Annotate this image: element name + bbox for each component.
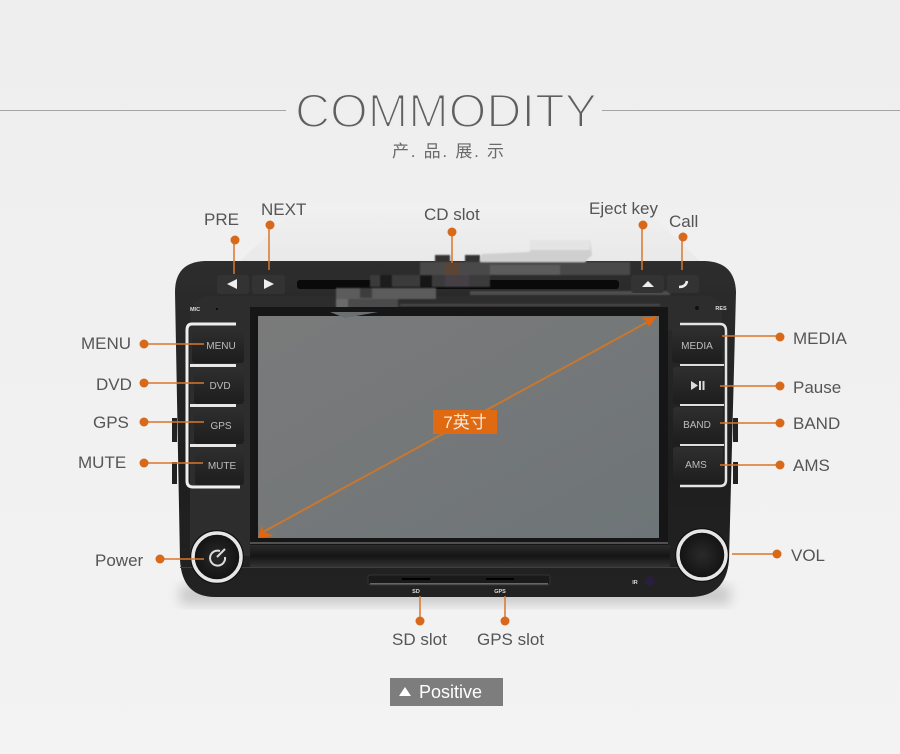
- callout: GPS: [93, 413, 204, 432]
- callout: VOL: VOL: [791, 546, 825, 565]
- callout: MUTE: [78, 453, 203, 472]
- callout: GPS slot: [477, 596, 544, 649]
- badge: 7 inch: [433, 410, 497, 434]
- callout: PRE: PRE: [204, 210, 239, 229]
- callout: SD slot: SD slot: [392, 630, 447, 649]
- button: play pause: [673, 367, 723, 404]
- button: call: [667, 275, 699, 293]
- button: next: [252, 275, 285, 294]
- device body: [175, 261, 736, 597]
- small device labels: RES: [715, 306, 727, 312]
- button: AMS: AMS: [685, 460, 707, 471]
- button: GPS: [194, 407, 244, 444]
- callout: Power: [95, 551, 204, 570]
- callout: CD slot: [424, 205, 480, 263]
- button: Positive: [390, 678, 503, 706]
- device: car head unit: [172, 240, 738, 597]
- CD slot: [297, 280, 619, 289]
- callout: Call: Call: [669, 212, 698, 231]
- power knob: [190, 530, 244, 584]
- diagonal screen-size arrow: [258, 316, 657, 538]
- badge: 7 inch: 7英寸: [443, 413, 487, 432]
- SD and GPS slots: [368, 575, 550, 595]
- volume knob: [675, 528, 729, 582]
- button: AMS: [673, 447, 723, 484]
- title: COMMODITY heading with rules: COMMODITY: [295, 84, 597, 137]
- callout: SD slot: [392, 596, 447, 649]
- callout: Call: [669, 212, 698, 270]
- button: MENU: MENU: [206, 341, 236, 352]
- callout: BAND: [720, 414, 840, 433]
- callout: Pause: [720, 378, 841, 397]
- button: MENU: [192, 327, 244, 363]
- callout: AMS: [720, 456, 830, 475]
- subtitle: Chinese heading: 产. 品. 展. 示: [392, 142, 504, 161]
- left button group: [187, 324, 244, 487]
- callout: MENU: MENU: [81, 334, 131, 353]
- callout: Pause: Pause: [793, 378, 841, 397]
- screen: [258, 316, 659, 538]
- callout: VOL: [732, 546, 825, 565]
- button: MUTE: [195, 447, 244, 485]
- top buttons: [217, 275, 699, 294]
- small device labels: MIC: [190, 307, 200, 313]
- callout: NEXT: [261, 200, 306, 270]
- callout: MENU: [81, 334, 204, 353]
- callout: MEDIA: MEDIA: [793, 329, 848, 348]
- SD and GPS slots: SD: [412, 589, 420, 595]
- callout: NEXT: NEXT: [261, 200, 306, 219]
- callout: MEDIA: [722, 329, 848, 348]
- callout: BAND: BAND: [793, 414, 840, 433]
- callout: Power: Power: [95, 551, 144, 570]
- button: eject: [631, 275, 664, 293]
- callout: Eject key: [589, 199, 658, 270]
- callout: MUTE: MUTE: [78, 453, 126, 472]
- pixelated logo blur: [330, 240, 670, 321]
- button: BAND: BAND: [683, 420, 711, 431]
- callout: Eject key: Eject key: [589, 199, 658, 218]
- callout: CD slot: CD slot: [424, 205, 480, 224]
- button: MUTE: MUTE: [208, 461, 236, 472]
- right button group: [672, 324, 726, 486]
- button: DVD: DVD: [209, 381, 231, 392]
- small device labels: [190, 306, 727, 586]
- button: Positive: Positive: [419, 682, 482, 702]
- SD and GPS slots: GPS: [494, 589, 506, 595]
- callout: DVD: DVD: [96, 375, 132, 394]
- screen bezel: [250, 307, 668, 545]
- button: BAND: [673, 407, 723, 444]
- button: DVD: [194, 367, 244, 404]
- small device labels: IR: [632, 580, 638, 586]
- button: GPS: GPS: [210, 421, 232, 432]
- callout: AMS: AMS: [793, 456, 830, 475]
- callout: PRE: [204, 210, 240, 274]
- button: MEDIA: [672, 328, 722, 363]
- button: MEDIA: MEDIA: [681, 341, 713, 352]
- callout: GPS: GPS: [93, 413, 129, 432]
- button: previous: [217, 275, 249, 294]
- callout: GPS slot: GPS slot: [477, 630, 544, 649]
- callout: DVD: [96, 375, 204, 394]
